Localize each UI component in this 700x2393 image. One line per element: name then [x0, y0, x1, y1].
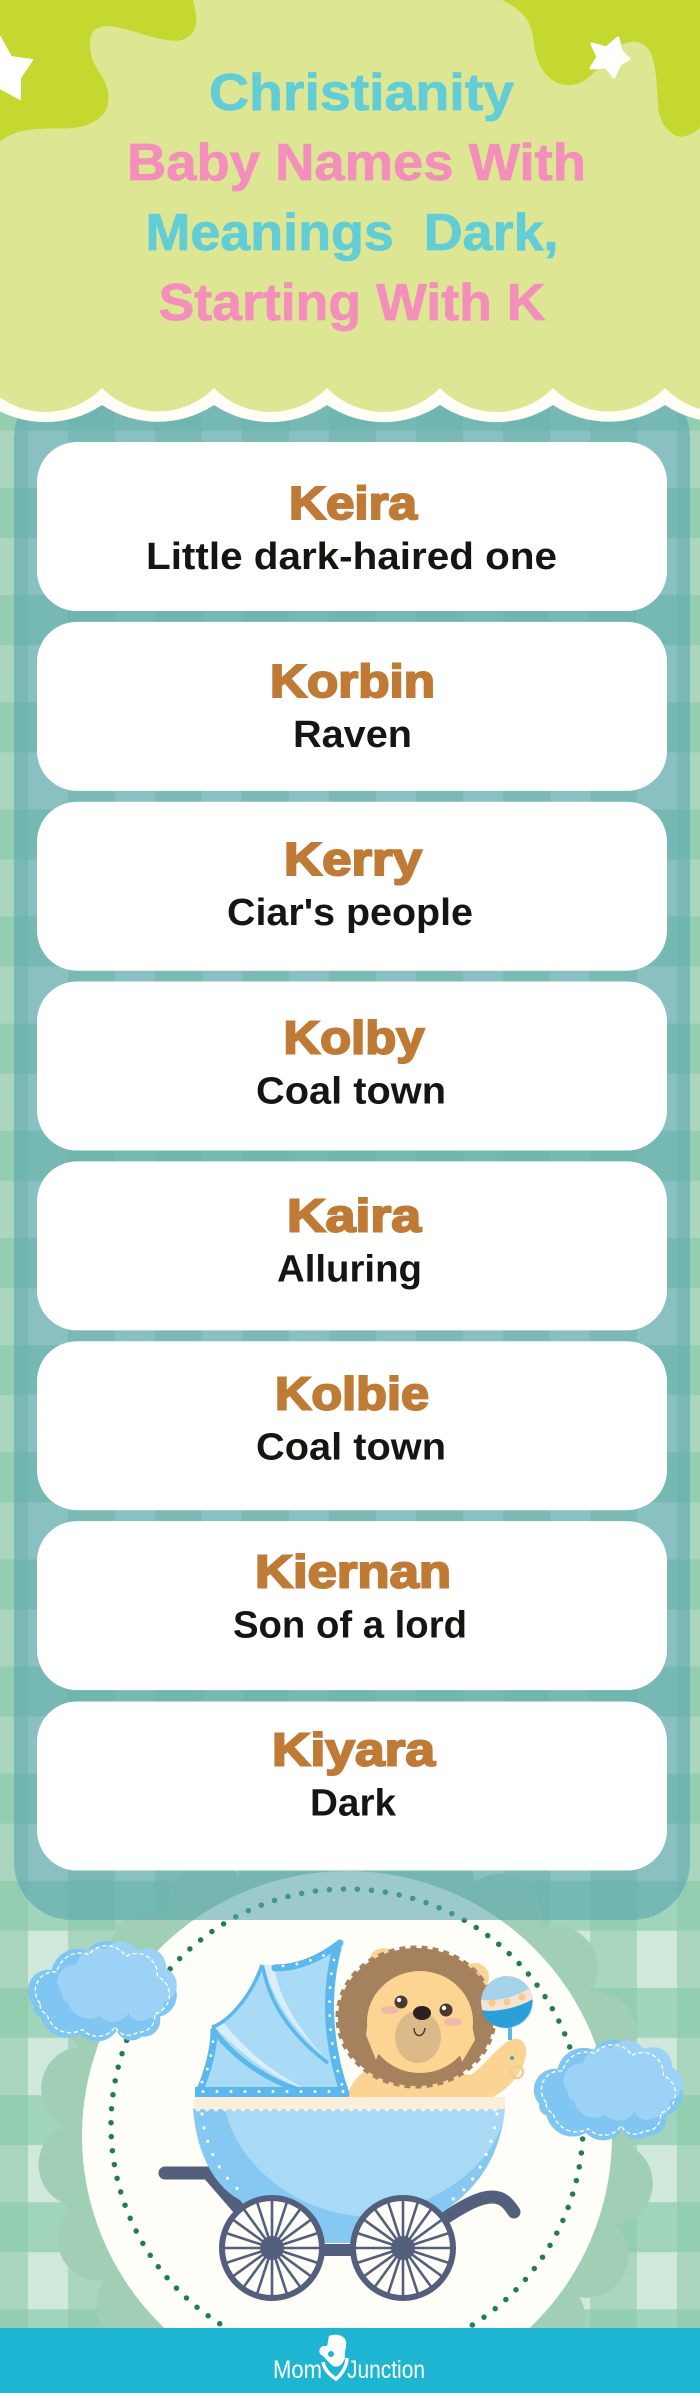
title	[127, 64, 586, 332]
icon: right star	[591, 38, 629, 77]
card: Korbin: Raven	[293, 714, 412, 756]
illustration: lion with rattle	[338, 1948, 533, 2100]
card: Kiernan: Kiernan	[255, 1546, 451, 1598]
title: Meanings Dark,	[146, 204, 558, 262]
logo: MomJunction: Mom	[273, 2356, 322, 2384]
icon: left cloud	[28, 1941, 177, 2041]
card: Kolbie	[37, 1341, 667, 1510]
card: Keira: Keira	[289, 477, 417, 529]
footer bar	[0, 2328, 700, 2393]
card: Kolby	[37, 982, 667, 1150]
cream circle	[82, 1871, 612, 2393]
logo: MomJunction: Junction	[347, 2356, 425, 2384]
icon: right cloud	[534, 2040, 683, 2140]
card: Kiernan	[37, 1521, 667, 1690]
card: Kerry	[37, 802, 667, 971]
card: Kolby: Coal town	[256, 1070, 446, 1112]
card: Kiyara	[37, 1702, 667, 1870]
card: Kolbie: Kolbie	[275, 1368, 429, 1420]
card: Kerry: Ciar's people	[227, 892, 473, 934]
card: Kaira	[37, 1161, 667, 1330]
card: Keira	[37, 442, 667, 611]
card: Kerry: Kerry	[284, 833, 422, 885]
scalloped green badge behind circle	[79, 1868, 615, 2393]
title: Baby Names With	[127, 134, 586, 192]
header background	[0, 0, 700, 422]
dotted green ring	[111, 1889, 583, 2361]
card: Korbin: Korbin	[270, 655, 435, 707]
card: Kiernan: Son of a lord	[233, 1605, 467, 1647]
card: Kaira: Kaira	[287, 1189, 421, 1241]
title: Christianity	[209, 64, 514, 122]
illustration: baby carriage	[165, 1942, 514, 2298]
card: Kiyara: Dark	[310, 1783, 397, 1825]
title: Starting With K	[158, 274, 546, 332]
icon: left star	[0, 37, 32, 99]
card: Kiyara: Kiyara	[272, 1724, 435, 1776]
card: Kolbie: Coal town	[256, 1426, 446, 1468]
card: Kaira: Alluring	[277, 1248, 422, 1290]
card: Korbin	[37, 622, 667, 791]
card: Kolby: Kolby	[284, 1011, 425, 1063]
translucent teal panel	[14, 380, 690, 1920]
card: Keira: Little dark-haired one	[146, 536, 557, 578]
logo: MomJunction	[273, 2335, 425, 2384]
